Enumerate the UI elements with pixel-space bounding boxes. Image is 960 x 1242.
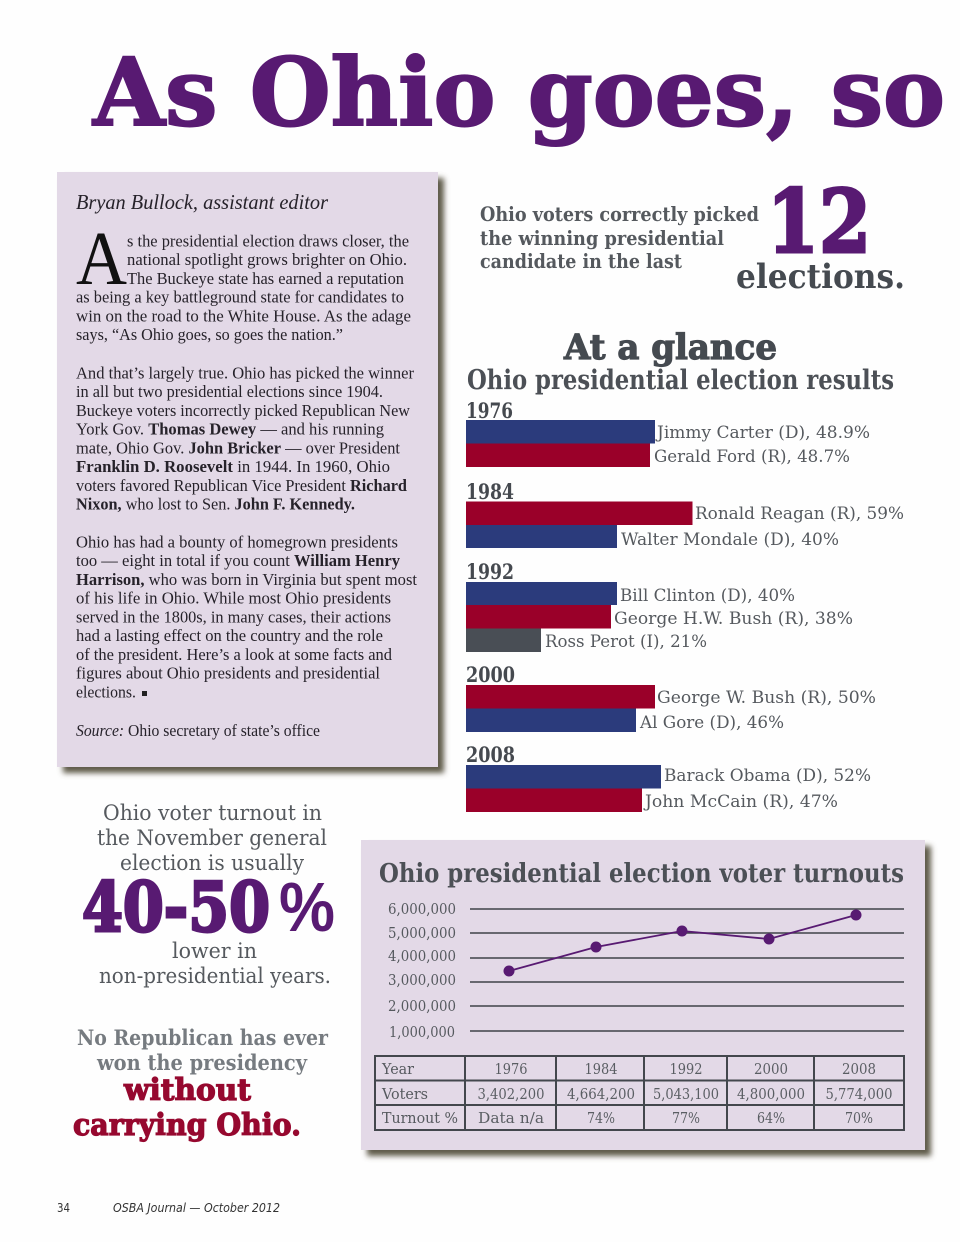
callout: no republican (73, 1025, 329, 1143)
article byline: Bryan Bullock, assistant editor (76, 190, 329, 214)
bar chart: 1992 (466, 559, 853, 652)
data table: 2000 (754, 1060, 788, 1078)
article paragraph 2: And that’s largely true. Ohio has picked the winner (76, 364, 414, 382)
article paragraph 1: says, “As Ohio goes, so goes the nation.” (76, 325, 343, 344)
data table: 5,043,100 (653, 1085, 719, 1103)
callout: 12 elections: candidate in the last (480, 250, 682, 273)
bar chart: 1976: Jimmy Carter (D), 48.9% (655, 423, 870, 443)
bar chart: 2008 (466, 742, 871, 812)
data table (375, 1056, 904, 1130)
bar chart: 2000 (466, 662, 876, 733)
article paragraph 1: s the presidential election draws closer, the (127, 232, 409, 250)
bar chart: 1976: 1976 (466, 398, 513, 423)
article paragraph 1: win on the road to the White House. As the adage (76, 306, 411, 326)
callout: no republican: without (123, 1073, 251, 1108)
callout: voter turnout: lower in (172, 939, 257, 963)
line chart: 1,000,000 (389, 1023, 455, 1041)
panel: article (57, 172, 444, 773)
article paragraph 2 (76, 364, 414, 514)
data table: Year (381, 1060, 415, 1078)
article paragraph 1 (76, 232, 411, 344)
article paragraph 1: as being a key battleground state for candidates to (76, 288, 404, 307)
article paragraph 3: served in the 1800s, in many cases, their actions (76, 608, 391, 626)
line chart: 3,000,000 (388, 971, 456, 989)
article paragraph 3: of the president. Here’s a look at some facts and (76, 645, 392, 664)
bar chart: 1984 (466, 479, 904, 550)
bar chart: 1984: 1984 (466, 479, 514, 504)
callout: 12 elections: the winning presidential (480, 227, 724, 250)
bar chart: 2000: 2000 (466, 662, 515, 687)
bar chart: 1992: Ross Perot (I), 21% (545, 632, 707, 652)
bar chart: 2000: Al Gore (D), 46% (639, 713, 784, 733)
data table: 4,800,000 (737, 1085, 805, 1103)
article paragraph 2: York Gov. Thomas Dewey — and his running (76, 420, 384, 439)
article paragraph 3: of his life in Ohio. While most Ohio presidents (76, 589, 391, 608)
title: As Ohio goes, so (92, 38, 945, 148)
data table: 1984 (584, 1060, 618, 1078)
bar chart: 1984: Walter Mondale (D), 40% (621, 530, 839, 550)
data table: 3,402,200 (478, 1085, 544, 1103)
drop cap: A (76, 217, 127, 301)
bar chart: 1992: 1992 (466, 559, 514, 584)
callout: 12 elections: Ohio voters correctly picked (480, 203, 759, 226)
callout: no republican: No Republican has ever (77, 1025, 329, 1050)
panel: voter turnouts (361, 840, 931, 1156)
line chart: 4,000,000 (388, 947, 456, 965)
callout: voter turnout: Ohio voter turnout in (103, 801, 322, 825)
article paragraph 3: figures about Ohio presidents and presidential (76, 664, 380, 683)
bar chart: 2008: Barack Obama (D), 52% (664, 766, 871, 786)
bar chart: 1976 (466, 398, 870, 467)
data table: 77% (672, 1109, 700, 1127)
article paragraph 2: in all but two presidential elections since 1904. (76, 382, 383, 401)
callout: voter turnout: the November general (97, 826, 327, 850)
callout: voter turnout (82, 801, 335, 988)
panel heading: Ohio presidential election voter turnouts (379, 859, 904, 889)
footer: 34 (57, 1201, 70, 1215)
article paragraph 2: Buckeye voters incorrectly picked Republican New (76, 401, 411, 420)
callout: voter turnout: % (279, 868, 335, 946)
data table: 4,664,200 (567, 1085, 635, 1103)
callout: 12 elections: 12 (767, 170, 871, 273)
heading: election results: Ohio presidential election results (467, 365, 894, 396)
bar chart: 2000: George W. Bush (R), 50% (657, 688, 876, 708)
footer: OSBA Journal — October 2012 (113, 1201, 280, 1215)
line chart: 6,000,000 (388, 900, 456, 918)
data table: Data n/a (478, 1109, 544, 1127)
heading: at a glance: At a glance (563, 327, 777, 368)
callout: voter turnout: non-presidential years. (99, 964, 331, 988)
line chart (388, 900, 904, 1041)
article paragraph 1: national spotlight grows brighter on Ohio. (127, 250, 407, 269)
article paragraph 2: Franklin D. Roosevelt in 1944. In 1960, Ohio (76, 457, 390, 476)
data table: Turnout % (382, 1109, 458, 1127)
article paragraph 3: Ohio has had a bounty of homegrown presidents (76, 532, 398, 552)
line chart: 2,000,000 (388, 997, 456, 1015)
data table: 1976 (494, 1060, 528, 1078)
article paragraph 3: elections. (76, 682, 136, 702)
line chart: 5,000,000 (388, 924, 456, 942)
bar chart: 1984: Ronald Reagan (R), 59% (695, 504, 904, 524)
article paragraph 1: The Buckeye state has earned a reputation (127, 269, 404, 288)
bar chart: 2008: John McCain (R), 47% (643, 792, 838, 812)
article paragraph 2: Nixon, who lost to Sen. John F. Kennedy. (76, 495, 355, 514)
article paragraph 2: mate, Ohio Gov. John Bricker — over President (76, 438, 400, 458)
data table: 70% (845, 1109, 873, 1127)
bar chart: 2008: 2008 (466, 742, 515, 767)
callout: 12 elections (480, 170, 905, 297)
bar chart: 1976: Gerald Ford (R), 48.7% (654, 447, 850, 467)
data table: Voters (381, 1085, 428, 1103)
callout: voter turnout: election is usually (120, 851, 304, 875)
bar chart: 1992: Bill Clinton (D), 40% (620, 586, 795, 606)
data table: 74% (587, 1109, 615, 1127)
callout: no republican: carrying Ohio. (73, 1108, 301, 1143)
data table: 5,774,000 (826, 1085, 892, 1103)
article paragraph 3: had a lasting effect on the country and the role (76, 626, 383, 645)
article paragraph 3 (76, 532, 417, 702)
article paragraph 3: Harrison, who was born in Virginia but spent most (76, 570, 417, 589)
callout: no republican: won the presidency (96, 1050, 308, 1075)
data table: 2008 (842, 1060, 876, 1078)
article paragraph 2: voters favored Republican Vice President Richard (76, 476, 408, 495)
callout: 12 elections: elections. (736, 257, 905, 297)
bar chart: 1992: George H.W. Bush (R), 38% (614, 609, 853, 629)
article paragraph 3: too — eight in total if you count William Henry (76, 551, 400, 570)
callout: voter turnout: 40-50 (82, 868, 270, 948)
data table: 1992 (670, 1060, 702, 1078)
data table: 64% (757, 1109, 785, 1127)
source note: Source: Ohio secretary of state’s office (76, 721, 320, 740)
